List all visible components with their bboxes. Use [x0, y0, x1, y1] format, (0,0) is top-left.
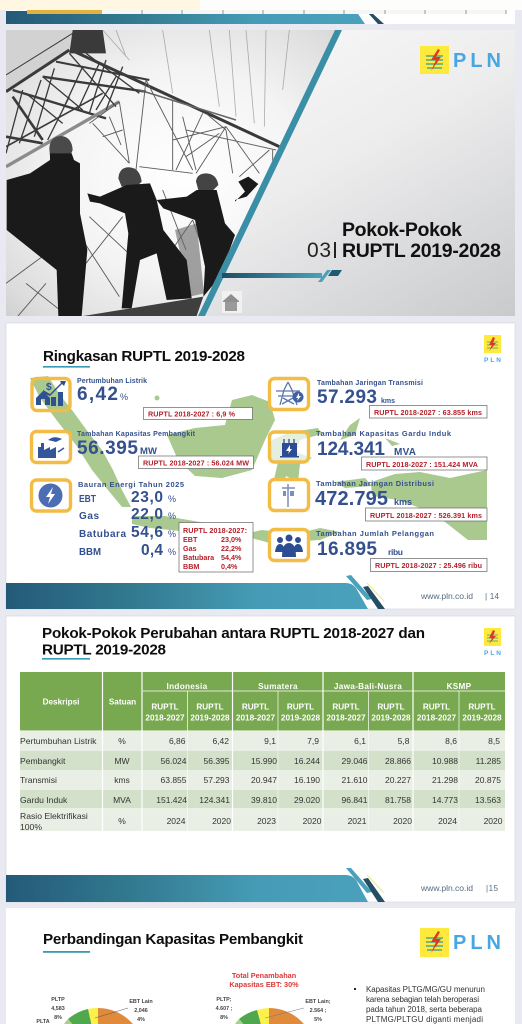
section title — [307, 219, 501, 262]
stat: kapasitas pembangkit: 56.395 — [77, 438, 138, 459]
pie chart: right: PLTP; — [216, 997, 232, 1003]
callout: total penambahan EBT — [230, 972, 298, 988]
callout: 25.496 ribu — [370, 558, 487, 572]
section title: RUPTL 2019-2028 — [342, 240, 501, 262]
row: pembangkit: Pembangkit — [20, 756, 66, 766]
text block: bullet note — [354, 985, 485, 1024]
stat: jaringan transmisi: kms — [381, 398, 395, 405]
row: pembangkit: 11.285 — [476, 756, 501, 766]
panel: section divider slide — [6, 30, 515, 330]
callout: energy mix 2018-2027: EBT — [183, 535, 198, 544]
stat: jaringan transmisi — [317, 380, 423, 408]
callout: 151.424 MVA — [362, 457, 487, 470]
pie chart: left: PLTP — [51, 997, 65, 1003]
icon: growth chart: $ — [46, 382, 52, 393]
footer band: www.pln.co.id — [420, 883, 473, 893]
row: rasio elektrifikasi: 2021 — [348, 816, 367, 826]
row: pembangkit: 29.046 — [342, 756, 368, 766]
row: gardu induk: MVA — [113, 795, 131, 805]
icon: customers group — [270, 530, 308, 560]
stat: jumlah pelanggan — [316, 529, 434, 560]
callout: energy mix 2018-2027 — [179, 522, 253, 572]
callout: energy mix 2018-2027: RUPTL 2018-2027: — [183, 526, 247, 535]
row: transmisi: 16.190 — [294, 775, 320, 785]
pie chart: right: 4.607 ; — [216, 1006, 233, 1012]
stat: jaringan transmisi: Tambahan Jaringan Transmisi — [317, 380, 423, 387]
table header: KSMP — [447, 682, 472, 691]
row: transmisi: 21.610 — [342, 775, 368, 785]
map of Indonesia — [30, 376, 487, 543]
title: Ringkasan RUPTL 2019-2028 — [43, 348, 245, 365]
row: pertumbuhan listrik: 6,86 — [169, 736, 186, 746]
row: rasio elektrifikasi: 2024 — [438, 816, 457, 826]
panel: Pokok-Pokok Perubahan slide — [6, 616, 515, 902]
callout: 526.391 kms: RUPTL 2018-2027 : 526.391 kms — [370, 511, 482, 520]
row: rasio elektrifikasi — [20, 811, 503, 832]
row: rasio elektrifikasi: 2020 — [212, 816, 231, 826]
row: pertumbuhan listrik: 6,1 — [354, 736, 366, 746]
energy mix figures: BBM — [79, 547, 101, 558]
row: gardu induk: 96.841 — [342, 795, 368, 805]
table header: 2018-2027 — [236, 714, 276, 722]
stat: jumlah pelanggan: Tambahan Jumlah Pelanggan — [316, 529, 434, 538]
title: RUPTL 2019-2028 — [42, 642, 166, 658]
row: pertumbuhan listrik — [20, 736, 500, 746]
panel: Ringkasan RUPTL slide — [6, 323, 515, 609]
callout: energy mix 2018-2027: Gas — [183, 544, 197, 553]
stat: pertumbuhan listrik: Pertumbuhan Listrik — [77, 378, 147, 385]
table header: RUPTL — [332, 702, 360, 712]
row: pertumbuhan listrik: 7,9 — [307, 736, 319, 746]
energy mix figures: Bauran Energi Tahun 2025 — [78, 480, 184, 489]
energy mix figures: EBT — [79, 494, 96, 505]
table header: Satuan — [109, 698, 136, 706]
row: rasio elektrifikasi: % — [118, 816, 126, 826]
energy mix figures: 0,4 — [141, 542, 163, 559]
footer band — [6, 868, 499, 902]
table header: 2019-2028 — [281, 714, 321, 722]
row: gardu induk: 81.758 — [385, 795, 411, 805]
energy mix figures: % — [168, 494, 176, 504]
callout: energy mix 2018-2027: Batubara — [183, 553, 215, 562]
table header: RUPTL — [287, 702, 314, 712]
pie chart: left: 4,583 — [51, 1006, 65, 1012]
row: rasio elektrifikasi: 2024 — [167, 816, 186, 826]
callout: energy mix 2018-2027: 23,0% — [221, 535, 242, 544]
worker 2 silhouette — [87, 167, 192, 308]
row: transmisi: 20.875 — [475, 775, 501, 785]
teal diagonal stripe — [198, 30, 342, 316]
table header: RUPTL — [423, 702, 450, 712]
pie chart: left: 8% — [54, 1015, 62, 1021]
callout: total penambahan EBT: Kapasitas EBT: 30% — [229, 980, 299, 989]
energy mix figures — [78, 480, 184, 559]
logo: PLN large: PLN — [453, 932, 501, 954]
row: transmisi — [20, 775, 501, 785]
energy mix figures: Batubara — [79, 529, 126, 540]
table header: RUPTL — [468, 702, 496, 712]
title — [42, 625, 425, 660]
table header: Jawa-Bali-Nusra — [334, 682, 402, 691]
icon: growth chart — [32, 378, 70, 410]
callout: 6,9 % — [144, 408, 252, 420]
callout: 63.855 kms — [370, 406, 487, 418]
footer band: www.pln.co.id — [420, 591, 473, 601]
stat: kapasitas pembangkit — [77, 431, 196, 459]
logo: PLN small — [484, 335, 501, 364]
worker 3 silhouette — [157, 173, 258, 297]
worker 1 silhouette — [7, 136, 87, 316]
row: rasio elektrifikasi: Rasio Elektrifikasi — [20, 811, 88, 821]
section title: 03 — [307, 239, 331, 262]
row: pembangkit — [20, 756, 501, 766]
table header: 2018-2027 — [326, 714, 366, 722]
pie chart: left: 2,046 — [134, 1008, 148, 1014]
callout: energy mix 2018-2027: 22,2% — [221, 544, 242, 553]
row: pembangkit: 56.395 — [204, 756, 230, 766]
logo: PLN large — [420, 928, 501, 957]
row: pembangkit: 16.244 — [294, 756, 320, 766]
row: pembangkit: 28.866 — [385, 756, 411, 766]
callout: 56.024 MW — [138, 456, 254, 468]
table header: 2018-2027 — [145, 714, 185, 722]
row: gardu induk — [20, 795, 501, 805]
table header: Sumatera — [258, 682, 298, 691]
row: gardu induk: Gardu Induk — [20, 795, 68, 805]
callout: 25.496 ribu: RUPTL 2018-2027 : 25.496 ribu — [375, 561, 482, 570]
callout: 6,9 %: RUPTL 2018-2027 : 6,9 % — [148, 410, 236, 418]
row: pembangkit: 15.990 — [251, 756, 277, 766]
stat: jaringan distribusi: kms — [394, 497, 412, 507]
energy mix figures: 54,6 — [131, 524, 163, 541]
icon: energy bolt — [32, 480, 70, 511]
pie chart: left: 4% — [137, 1017, 145, 1023]
table header: 2019-2028 — [462, 714, 502, 722]
energy mix figures: 22,0 — [131, 506, 163, 523]
callout: energy mix 2018-2027: 54,4% — [221, 553, 242, 562]
table header — [20, 672, 505, 731]
row: gardu induk: 124.341 — [199, 795, 230, 805]
row: transmisi: 63.855 — [160, 775, 187, 785]
logo: PLN large — [420, 46, 501, 74]
text block: bullet note: PLTMG/PLTGU diganti menjadi — [366, 1015, 483, 1024]
photo: workers under transmission tower — [6, 30, 346, 330]
pie chart: right — [216, 997, 331, 1024]
energy mix figures: Gas — [79, 511, 99, 522]
icon: power plant — [32, 432, 70, 462]
row: pembangkit: MW — [114, 756, 130, 766]
logo: PLN small: PLN — [484, 650, 501, 657]
row: transmisi: 21.298 — [432, 775, 458, 785]
callout: 56.024 MW: RUPTL 2018-2027 : 56.024 MW — [143, 458, 249, 468]
row: pembangkit: 10.988 — [432, 756, 458, 766]
table header: Indonesia — [167, 682, 208, 691]
tree behind workers — [175, 223, 204, 297]
decorative title underline with slashes — [222, 270, 342, 282]
row: gardu induk: 151.424 — [156, 795, 187, 805]
stat: jaringan distribusi: 472.795 — [315, 488, 388, 510]
pie chart: right: 5% — [314, 1017, 322, 1023]
stat: kapasitas pembangkit: Tambahan Kapasitas Pembangkit — [77, 431, 196, 438]
energy mix figures: 23,0 — [131, 489, 163, 506]
row: pertumbuhan listrik: 8,6 — [445, 736, 457, 746]
row: transmisi: 20.947 — [251, 775, 277, 785]
icon: distribution pole — [270, 480, 308, 510]
callout: total penambahan EBT: Total Penambahan — [232, 971, 296, 980]
text block: bullet note: Kapasitas PLTG/MG/GU menurun — [366, 985, 485, 994]
row: pertumbuhan listrik: 8,5 — [488, 736, 500, 746]
logo: PLN small: PLN — [484, 357, 501, 364]
row: rasio elektrifikasi: 2020 — [393, 816, 412, 826]
row: transmisi: 20.227 — [385, 775, 411, 785]
callout: 63.855 kms: RUPTL 2018-2027 : 63.855 kms — [374, 408, 482, 417]
energy mix figures: % — [168, 529, 176, 539]
energy mix figures: % — [168, 547, 176, 557]
icon: substation — [270, 432, 308, 462]
stat: kapasitas gardu induk: MVA — [394, 447, 416, 458]
pie chart: right: 8% — [220, 1015, 228, 1021]
stat: pertumbuhan listrik — [77, 378, 147, 405]
row: pertumbuhan listrik: 9,1 — [264, 736, 276, 746]
row: rasio elektrifikasi: 2020 — [303, 816, 322, 826]
section title: Pokok-Pokok — [342, 219, 462, 241]
title: Perbandingan Kapasitas Pembangkit — [43, 931, 303, 948]
row: transmisi: kms — [114, 775, 130, 785]
row: gardu induk: 39.810 — [251, 795, 277, 805]
logo: PLN large: PLN — [453, 50, 501, 72]
row: pembangkit: 56.024 — [160, 756, 187, 766]
pie chart: left — [36, 997, 153, 1024]
footer band — [6, 575, 499, 609]
stat: jaringan transmisi: 57.293 — [317, 387, 377, 408]
row: pertumbuhan listrik: 5,8 — [398, 736, 410, 746]
row: transmisi: 57.293 — [204, 775, 230, 785]
callout: 151.424 MVA: RUPTL 2018-2027 : 151.424 MVA — [366, 460, 478, 469]
row: rasio elektrifikasi: 100% — [20, 822, 42, 832]
callout: energy mix 2018-2027: BBM — [183, 562, 199, 571]
title: Pokok-Pokok Perubahan antara RUPTL 2018-2027 dan — [42, 625, 425, 642]
text block: bullet note: pada tahun 2018, serta beberapa — [366, 1005, 483, 1014]
table header: RUPTL — [377, 702, 405, 712]
stat: kapasitas pembangkit: MW — [140, 446, 157, 457]
row: rasio elektrifikasi: 2020 — [484, 816, 503, 826]
footer band: |15 — [486, 884, 499, 893]
row: transmisi: Transmisi — [20, 775, 57, 785]
stat: jumlah pelanggan: ribu — [388, 547, 403, 557]
text block: bullet note: karena sebagian telah beroperasi — [366, 995, 479, 1004]
row: rasio elektrifikasi: 2023 — [257, 816, 276, 826]
row: gardu induk: 14.773 — [432, 795, 458, 805]
icon: transmission tower — [270, 378, 308, 410]
row: pertumbuhan listrik: 6,42 — [212, 736, 229, 746]
stat: kapasitas gardu induk — [316, 429, 452, 460]
row: gardu induk: 29.020 — [294, 795, 320, 805]
pie chart: right: 2.564 ; — [310, 1008, 327, 1014]
icon: home — [222, 291, 242, 313]
table header: Deskripsi — [43, 698, 79, 706]
table header: RUPTL — [242, 702, 269, 712]
stat: kapasitas gardu induk: 124.341 — [317, 439, 385, 460]
callout: 526.391 kms — [366, 508, 487, 521]
row: pertumbuhan listrik: Pertumbuhan Listrik — [20, 736, 97, 746]
table header: 2019-2028 — [190, 714, 230, 722]
table header: RUPTL — [151, 702, 179, 712]
stat: pertumbuhan listrik: 6,42 — [77, 384, 118, 405]
stat: pertumbuhan listrik: % — [120, 392, 128, 402]
previous slide fragment — [0, 0, 522, 24]
row: pertumbuhan listrik: % — [118, 736, 126, 746]
table header: 2018-2027 — [417, 714, 457, 722]
callout: energy mix 2018-2027: 0,4% — [221, 562, 238, 571]
pie chart: left: EBT Lain — [129, 999, 153, 1005]
table header: 2019-2028 — [371, 714, 411, 722]
comparison table — [20, 672, 505, 832]
table row backgrounds — [20, 731, 505, 831]
pie chart: right: EBT Lain; — [305, 999, 331, 1005]
footer band: | 14 — [485, 592, 499, 601]
table header: RUPTL — [196, 702, 224, 712]
stat: jaringan distribusi — [315, 479, 434, 510]
stat: jumlah pelanggan: 16.895 — [317, 539, 377, 560]
panel: Perbandingan Kapasitas Pembangkit slide — [6, 908, 515, 1024]
row: gardu induk: 13.563 — [475, 795, 501, 805]
logo: PLN small — [484, 628, 501, 657]
energy mix figures: % — [168, 511, 176, 521]
stat: kapasitas gardu induk: Tambahan Kapasitas Gardu Induk — [316, 429, 452, 438]
stat: jaringan distribusi: Tambahan Jaringan Distribusi — [316, 479, 434, 488]
